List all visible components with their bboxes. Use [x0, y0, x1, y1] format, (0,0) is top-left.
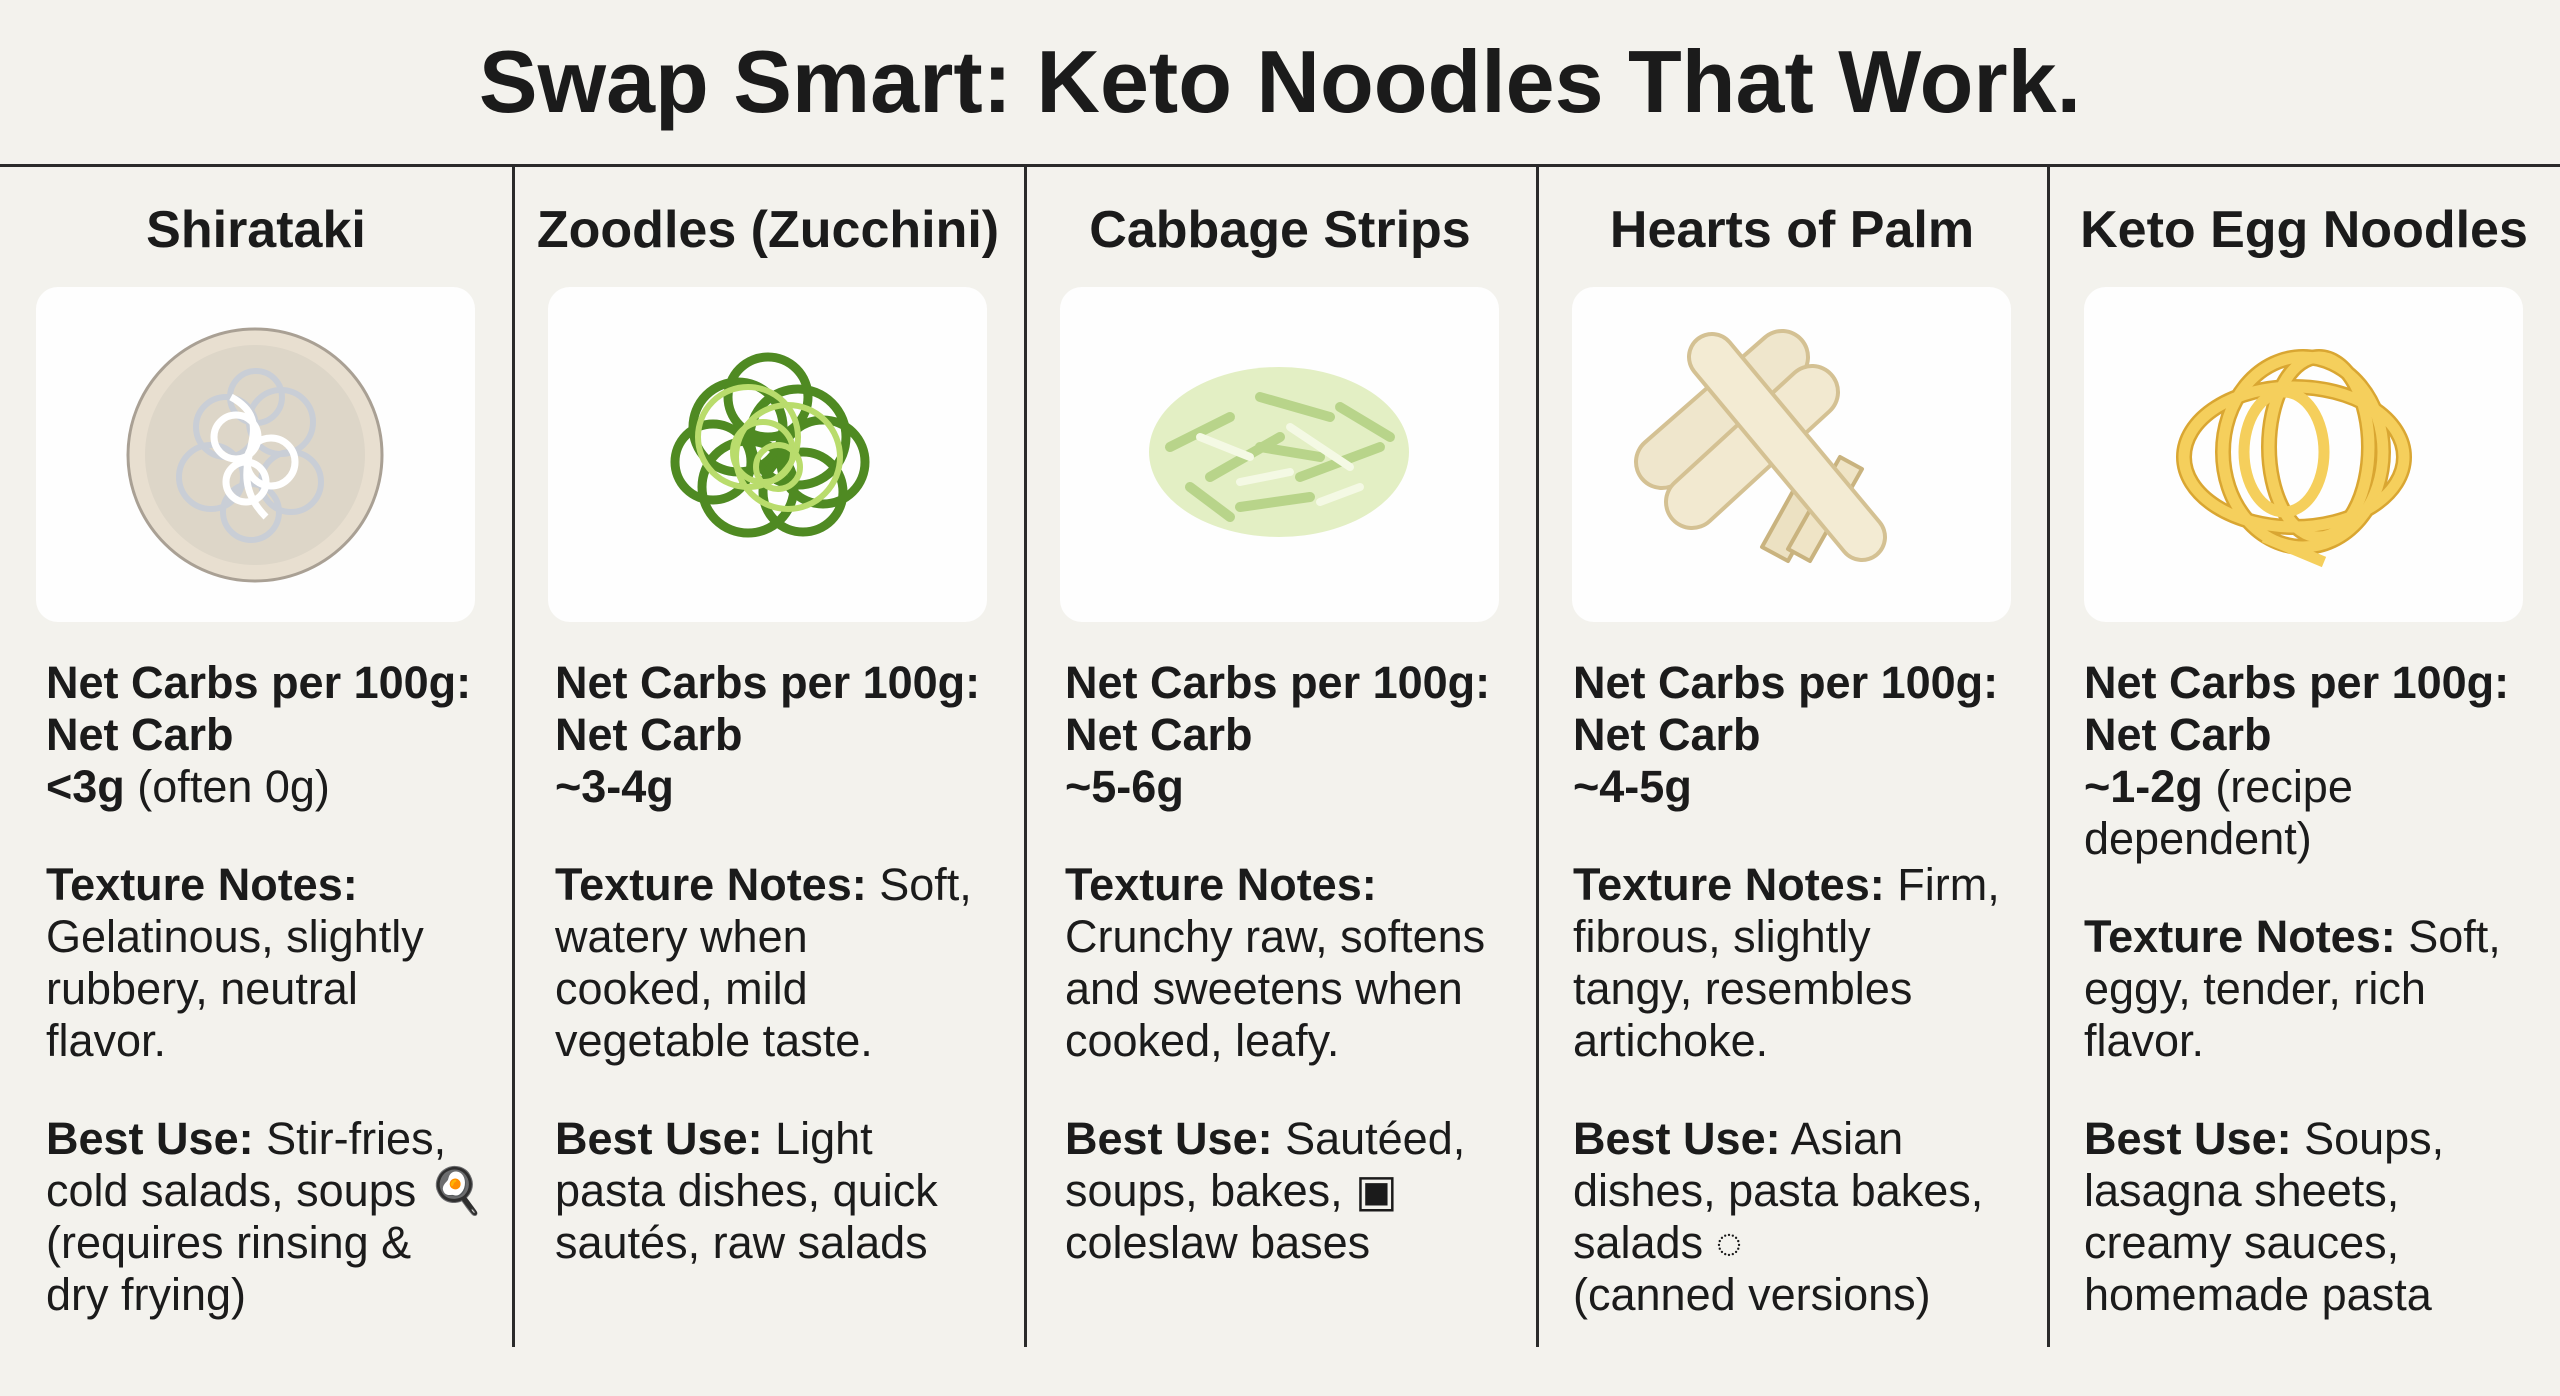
- heading: hearts of palm: Hearts of Palm: [1610, 201, 1974, 259]
- panel: hearts of palm: [1572, 201, 2011, 1320]
- text: zoodles details: ~3-4g: [555, 761, 674, 812]
- panel: zoodles: [537, 201, 999, 1268]
- title: Swap Smart: Keto Noodles That Work.: [479, 32, 2081, 131]
- text: zoodles details: Net Carb: [555, 709, 743, 760]
- heading: keto egg noodles: Keto Egg Noodles: [2080, 201, 2528, 259]
- text: shirataki details: Net Carbs per 100g:: [46, 657, 471, 708]
- heading: zoodles: Zoodles (Zucchini): [537, 201, 999, 259]
- text: egg noodles details: ~1-2g (recipe dependent): [2084, 761, 2353, 864]
- icon: shirataki bowl: [36, 287, 475, 622]
- text: shirataki details: <3g (often 0g): [46, 761, 330, 812]
- text: hearts of palm details: Texture Notes: Firm, fibrous, slightly: [1573, 859, 2000, 962]
- text: cabbage details: ~5-6g: [1065, 761, 1184, 812]
- panel: shirataki: [36, 201, 485, 1320]
- text: cabbage details: Crunchy raw, softens and sweetens when cooked, leafy.: [1065, 911, 1485, 1066]
- text: hearts of palm details: Best Use: Asian dishes, pasta bakes, salads ◌: [1573, 1113, 1983, 1268]
- text: zoodles details: Texture Notes: Soft, watery when: [555, 859, 972, 962]
- text: zoodles details: cooked, mild vegetable taste.: [555, 963, 873, 1066]
- icon: cabbage pile: [1060, 287, 1499, 622]
- heading: cabbage: Cabbage Strips: [1089, 201, 1471, 259]
- panel: cabbage: [1060, 201, 1499, 1268]
- text: shirataki details: Best Use: Stir-fries, cold salads, soups 🍳 (requires rinsing & dry frying): [46, 1113, 485, 1320]
- text: egg noodles details: Texture Notes: Soft, eggy, tender, rich flavor.: [2084, 911, 2501, 1066]
- text: hearts of palm details: Net Carbs per 100g:: [1573, 657, 1998, 708]
- text: egg noodles details: Net Carb: [2084, 709, 2272, 760]
- text: egg noodles details: Net Carbs per 100g:: [2084, 657, 2509, 708]
- text: shirataki details: Gelatinous, slightly rubbery, neutral flavor.: [46, 911, 424, 1066]
- text: zoodles details: Net Carbs per 100g:: [555, 657, 980, 708]
- text: zoodles details: pasta dishes, quick sautés, raw salads: [555, 1165, 938, 1268]
- icon: egg noodle nest: [2084, 287, 2523, 622]
- text: hearts of palm details: [1573, 657, 2000, 1320]
- text: hearts of palm details: tangy, resembles artichoke.: [1573, 963, 1912, 1066]
- text: hearts of palm details: ~4-5g: [1573, 761, 1692, 812]
- text: cabbage details: Net Carbs per 100g:: [1065, 657, 1490, 708]
- text: cabbage details: Net Carb: [1065, 709, 1253, 760]
- text: cabbage details: Best Use: Sautéed, soups, bakes, ▣ coleslaw bases: [1065, 1113, 1465, 1268]
- text: hearts of palm details: (canned versions): [1573, 1269, 1931, 1320]
- text: egg noodles details: [2084, 657, 2509, 1320]
- heading: shirataki: Shirataki: [146, 201, 366, 259]
- text: egg noodles details: Best Use: Soups, lasagna sheets, creamy sauces, homemade pasta: [2084, 1113, 2444, 1320]
- text: cabbage details: Texture Notes:: [1065, 859, 1377, 910]
- text: zoodles details: Best Use: Light: [555, 1113, 873, 1164]
- icon: zucchini spirals: [548, 287, 987, 622]
- text: shirataki details: Texture Notes:: [46, 859, 358, 910]
- text: zoodles details: [555, 657, 980, 1268]
- text: cabbage details: [1065, 657, 1490, 1268]
- icon: palm stalks: [1572, 287, 2011, 622]
- panel: keto egg noodles: [2080, 201, 2528, 1320]
- text: hearts of palm details: Net Carb: [1573, 709, 1761, 760]
- text: shirataki details: Net Carb: [46, 709, 234, 760]
- text: shirataki details: [46, 657, 485, 1320]
